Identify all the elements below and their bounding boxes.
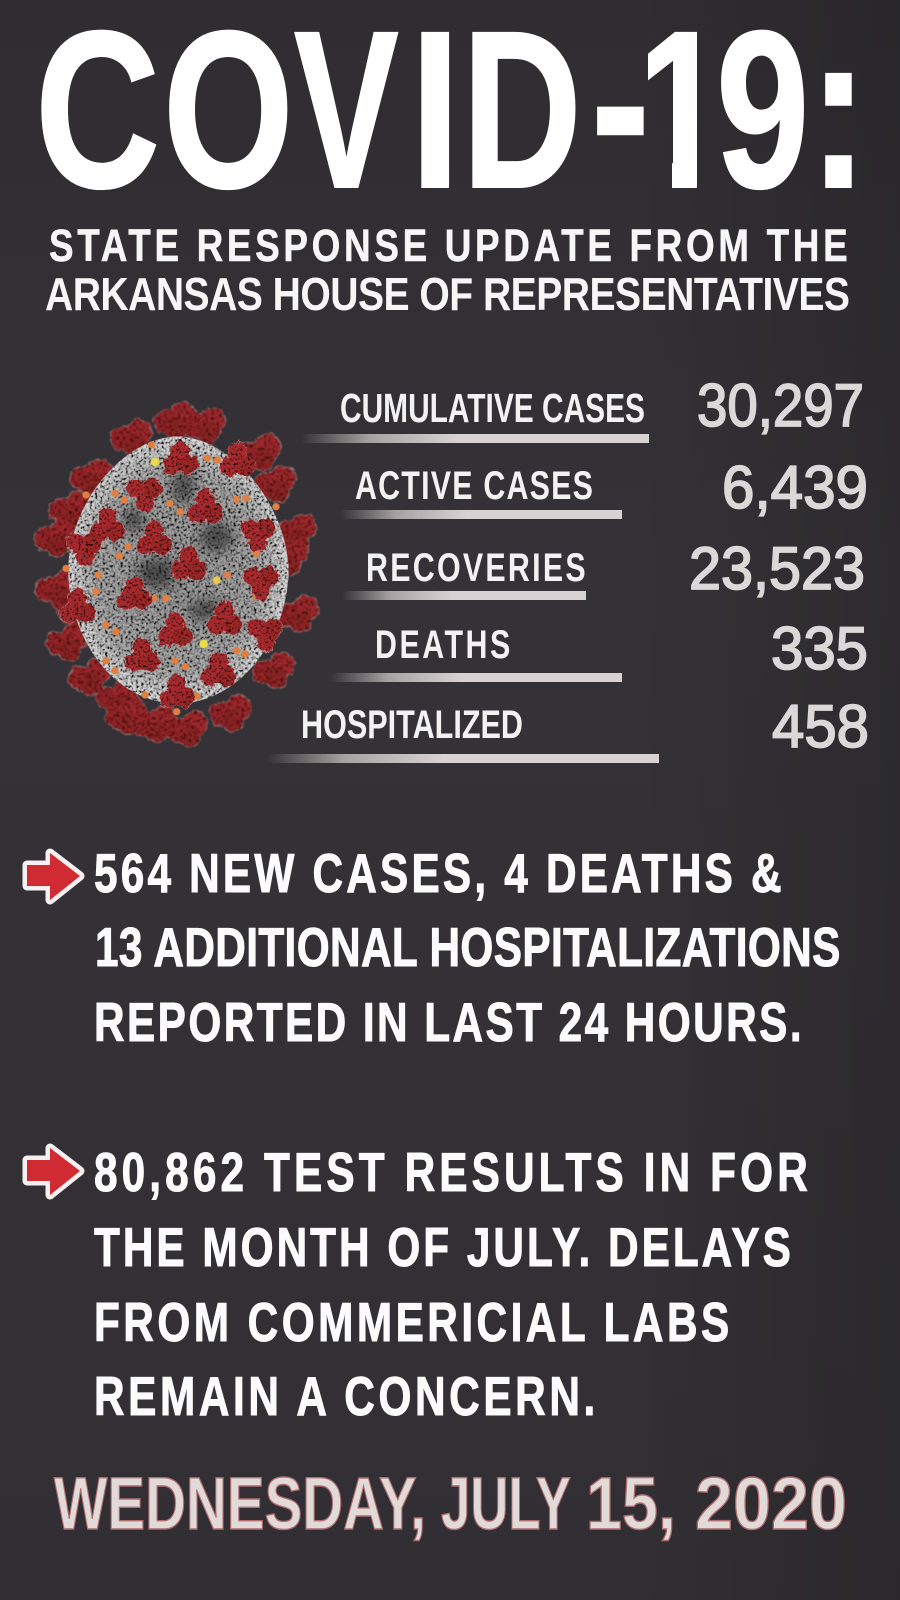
stat row: active cases: 6,439 [722,454,868,521]
text block: test results: REMAIN A CONCERN. [94,1367,595,1427]
orange and yellow dots [62,441,280,715]
stat row: hospitalized [266,693,869,763]
stat row: deaths [330,615,868,682]
stat row: recoveries: 23,523 [689,535,865,602]
stat row: recoveries [342,535,865,602]
stat row: active cases: ACTIVE CASES [355,463,593,508]
subtitle [45,221,850,321]
text block: test results: 80,862 TEST RESULTS IN FOR [94,1143,808,1203]
virus body [68,437,288,703]
date footer [54,1462,847,1545]
body shadows [122,470,233,620]
text block: new cases [94,844,840,1053]
outer spikes [34,402,318,748]
date footer: JULY [441,1462,571,1545]
text block: new cases: 13 ADDITIONAL HOSPITALIZATIONS [95,918,840,978]
stat row: cumulative cases: 30,297 [697,372,864,439]
subtitle: STATE RESPONSE UPDATE FROM THE [49,221,848,271]
icon: coronavirus illustration [34,402,318,748]
icon: red arrow 2 [27,1148,80,1195]
text block: test results: THE MONTH OF JULY. DELAYS [94,1218,791,1278]
date footer: 2020 [695,1462,847,1545]
text block: new cases: 564 NEW CASES, 4 DEATHS & [94,844,782,904]
text block: test results: FROM COMMERICIAL LABS [94,1293,729,1353]
stat row: deaths: DEATHS [375,622,510,667]
stat row: recoveries: RECOVERIES [366,545,586,590]
date footer: WEDNESDAY, [54,1462,426,1545]
stat row: cumulative cases [300,372,864,443]
stat row: cumulative cases: CUMULATIVE CASES [340,385,645,431]
stat row: hospitalized: HOSPITALIZED [301,703,523,747]
text block: new cases: REPORTED IN LAST 24 HOURS. [94,993,802,1053]
inner spikes [57,439,287,708]
icon: red arrow 1 [27,853,80,900]
stat row: active cases [340,454,868,521]
title [41,30,852,190]
stat row: hospitalized: 458 [772,693,869,760]
subtitle: ARKANSAS HOUSE OF REPRESENTATIVES [45,269,850,321]
date footer: 15, [586,1462,676,1545]
stat row: deaths: 335 [771,615,868,682]
text block: test results [94,1143,808,1427]
